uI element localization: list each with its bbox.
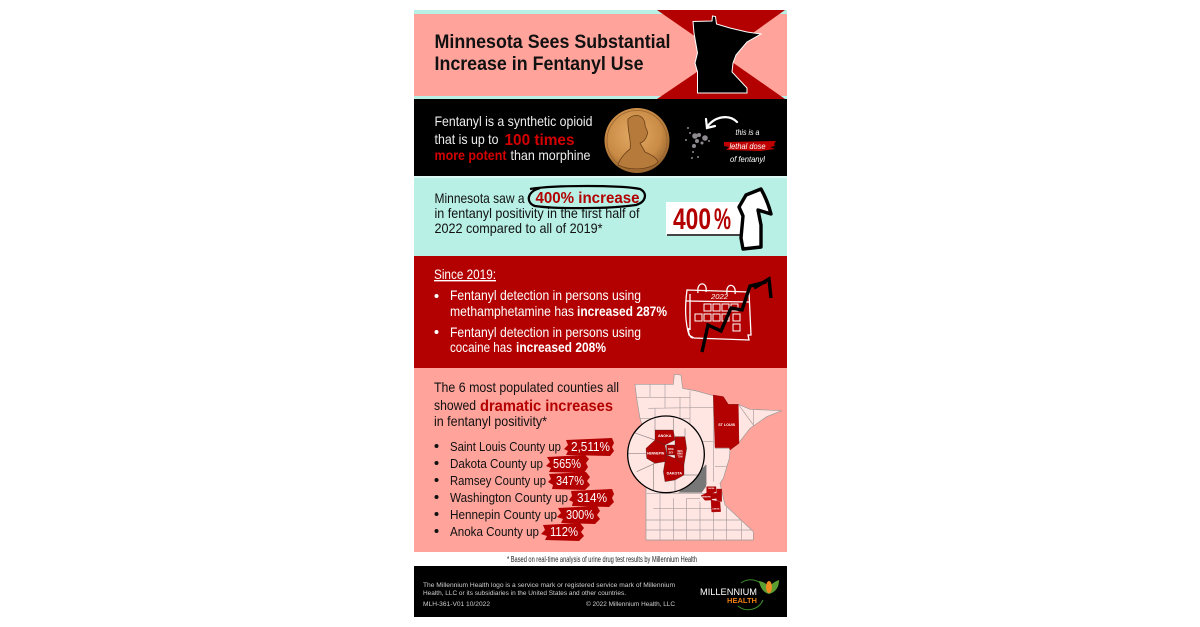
county list: Dakota County up <box>450 456 543 471</box>
bullet list: Fentanyl detection in persons using <box>450 324 641 340</box>
potency text: more potent <box>434 147 507 163</box>
bullet list: increased 287% <box>577 303 667 319</box>
legal text: Health, LLC or its subsidiaries in the United States and other countries. <box>423 590 626 597</box>
St Louis county: ST LOUIS <box>718 423 736 427</box>
since 2019 heading: Since 2019: <box>434 266 496 282</box>
legal text: © 2022 Millennium Health, LLC <box>586 600 675 608</box>
county list: Ramsey County up <box>450 473 546 488</box>
bullet list: Fentanyl detection in persons using <box>450 287 641 303</box>
panel: counties <box>414 368 787 552</box>
icon: Minnesota silhouette <box>693 16 761 93</box>
increase text <box>434 190 640 236</box>
potency text <box>434 113 592 163</box>
lethal dose label: of fentanyl <box>730 154 766 164</box>
lens inset: HENNEPIN <box>647 452 665 456</box>
map of Minnesota counties: HENNEPIN <box>702 497 711 499</box>
400% badge: 400 <box>673 203 711 236</box>
400% badge <box>666 202 744 236</box>
lethal dose label: this is a <box>736 127 760 137</box>
metro counties small <box>701 487 722 512</box>
county list: 2,511% <box>571 439 610 454</box>
lens inset: DAKOTA <box>667 472 682 476</box>
lens inset: TON <box>678 456 683 458</box>
bullet list: methamphetamine has <box>450 303 574 319</box>
bullet list: cocaine has <box>450 339 512 355</box>
lethal dose label <box>724 127 776 164</box>
lens inset: WAS <box>677 450 683 453</box>
county list: 347% <box>556 473 584 488</box>
counties heading <box>434 379 619 429</box>
logo: Millennium Health: MILLENNIUM <box>700 587 757 598</box>
panel: 400% increase <box>414 176 787 256</box>
legal text: MLH-361-V01 10/2022 <box>423 601 490 608</box>
icon: calendar with rising arrow <box>686 279 771 352</box>
county list: Hennepin County up <box>450 507 557 522</box>
county list: Saint Louis County up <box>450 439 561 454</box>
counties heading: The 6 most populated counties all <box>434 379 619 395</box>
county list <box>434 438 614 541</box>
county list: 112% <box>550 524 578 539</box>
panel: potency comparison <box>414 99 787 176</box>
bullet list <box>434 287 667 355</box>
county list: Anoka County up <box>450 524 539 539</box>
county list: 300% <box>566 507 594 522</box>
lens inset: HING <box>677 454 683 456</box>
lens inset <box>627 416 705 493</box>
hand-drawn ellipse <box>529 186 645 208</box>
logo: Millennium Health: HEALTH <box>727 596 757 605</box>
lens inset: RAM- <box>668 448 674 451</box>
arrow to dose <box>706 117 737 128</box>
panel: footer <box>414 566 787 617</box>
icon: lethal dose specks <box>685 127 710 159</box>
red bow-tie backdrop <box>657 10 785 99</box>
increase text: Minnesota saw a <box>434 190 525 206</box>
title: Increase in Fentanyl Use <box>434 53 644 75</box>
panel: since 2019 <box>414 256 787 368</box>
counties heading: in fentanyl positivity* <box>434 413 547 429</box>
increase text: in fentanyl positivity in the first half of <box>434 205 640 221</box>
increase text: 400% increase <box>536 190 640 207</box>
St Louis county <box>713 395 739 450</box>
gray lens connector <box>678 464 706 493</box>
legal text <box>423 582 675 608</box>
panel: header <box>414 10 787 100</box>
lens inset: ANOKA <box>658 434 672 438</box>
map of Minnesota counties: DAKOTA <box>713 507 720 510</box>
footnote: * Based on real-time analysis of urine drug test results by Millennium Health <box>507 554 697 564</box>
counties heading: showed <box>434 397 476 413</box>
icon: up arrow <box>739 189 771 249</box>
legal text: The Millennium Health logo is a service mark or registered service mark of Millennium <box>423 582 675 589</box>
potency text: Fentanyl is a synthetic opioid <box>434 113 592 129</box>
county list: 565% <box>553 456 581 471</box>
map of Minnesota counties: ANOKA <box>708 487 715 490</box>
county list: 314% <box>577 490 607 505</box>
bullet list: increased 208% <box>516 339 606 355</box>
potency text: than morphine <box>510 147 591 163</box>
potency text: that is up to <box>434 131 499 147</box>
county lines <box>637 384 753 540</box>
increase text: 2022 compared to all of 2019* <box>434 220 603 236</box>
400% badge: % <box>714 203 731 236</box>
counties heading: dramatic increases <box>480 398 613 415</box>
lens inset: SEY <box>669 452 674 454</box>
title: Minnesota Sees Substantial <box>434 31 670 53</box>
county list: Washington County up <box>450 490 568 505</box>
potency text: 100 times <box>504 132 575 149</box>
logo: Millennium Health <box>700 580 779 610</box>
icon: calendar with rising arrow: 2022 <box>710 292 729 301</box>
map of Minnesota counties <box>627 374 782 540</box>
icon: penny <box>604 108 670 173</box>
lethal dose label: lethal dose <box>730 141 766 151</box>
